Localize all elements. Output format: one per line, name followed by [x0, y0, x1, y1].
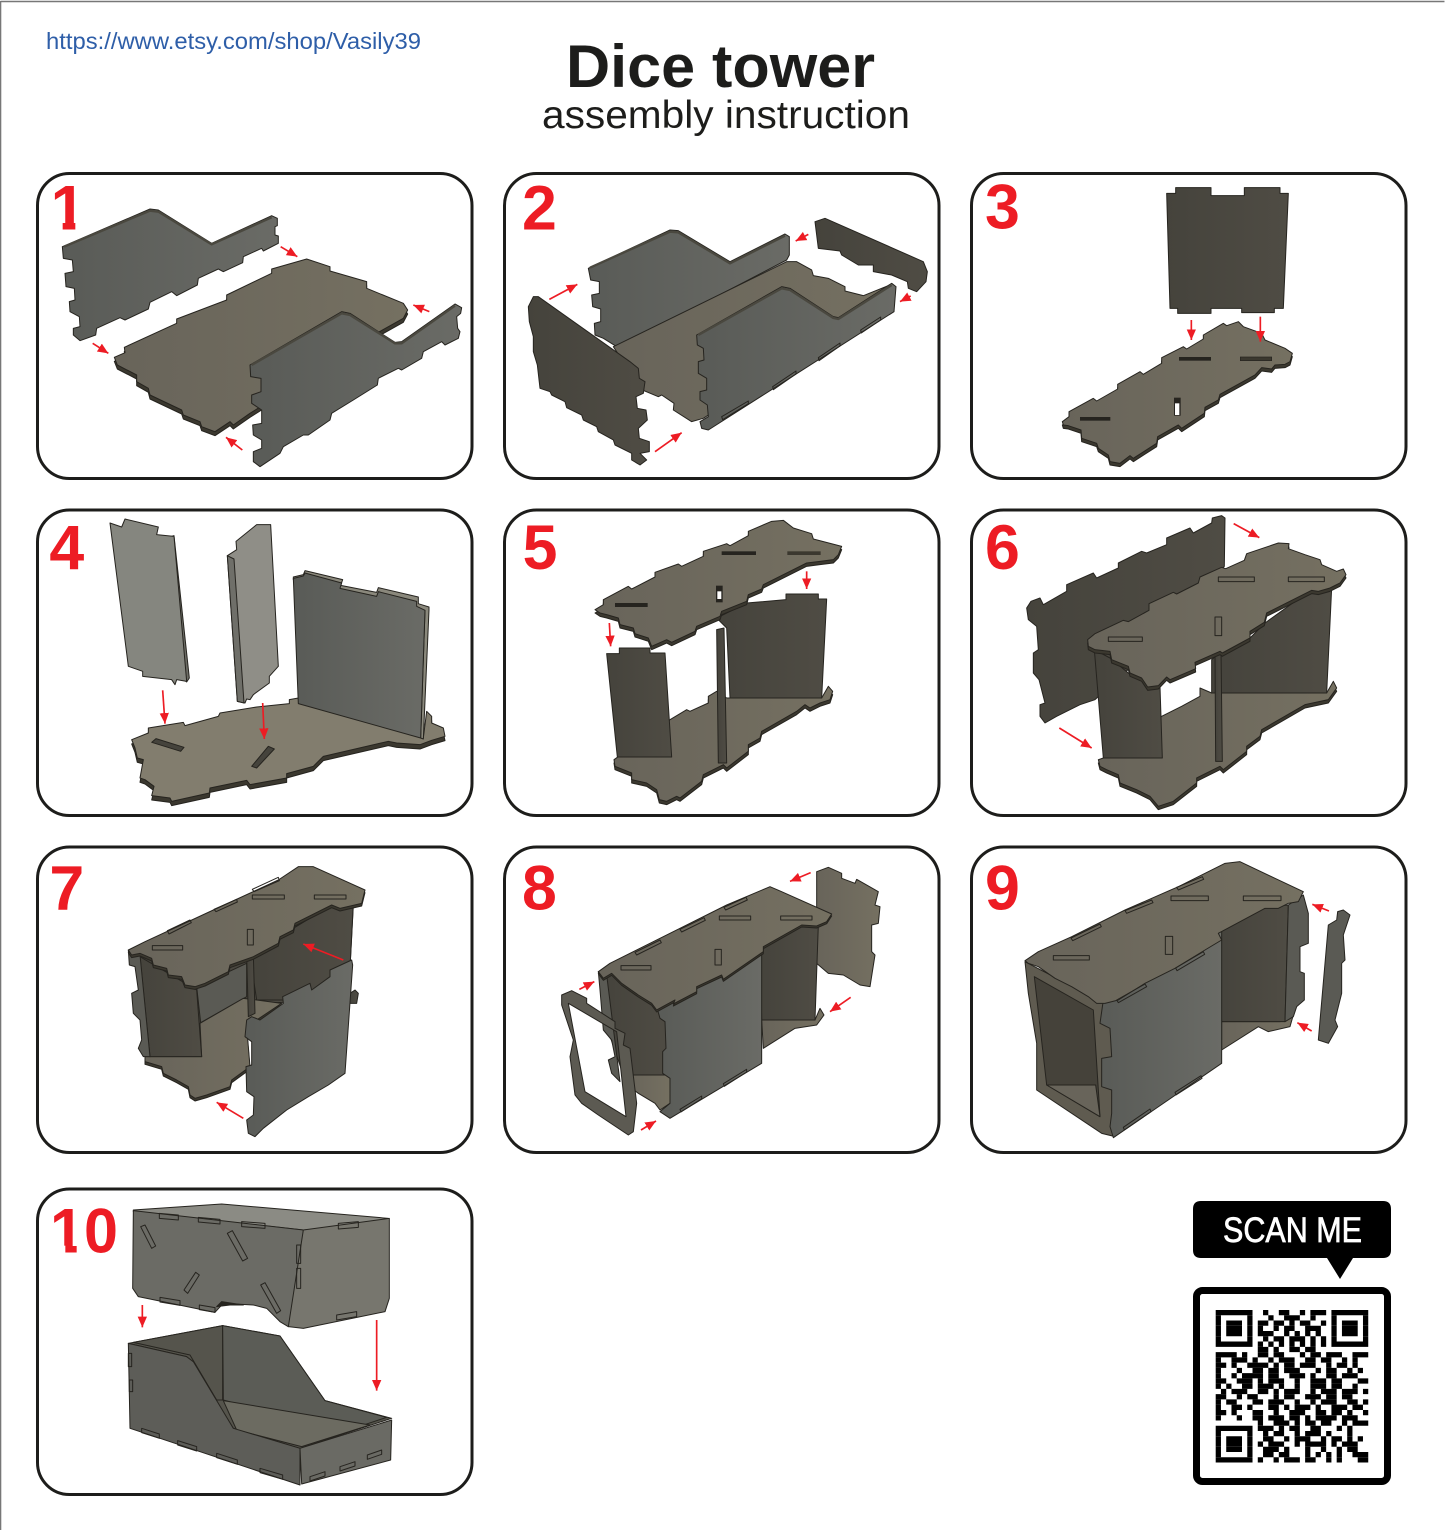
back wall [760, 923, 818, 1020]
shop URL: https://www.etsy.com/shop/Vasily39 [46, 28, 421, 54]
arrows [1297, 904, 1329, 1031]
QR code [1196, 1290, 1388, 1482]
step number 5: 5 [523, 513, 558, 583]
scan me callout [1193, 1201, 1391, 1279]
subtitle: assembly instruction [542, 94, 910, 137]
right floor [762, 1008, 824, 1048]
front frame [562, 991, 637, 1135]
right side wall [250, 304, 462, 467]
floor plate [114, 259, 408, 436]
left wall strip [128, 950, 150, 1057]
arrows [1191, 317, 1260, 342]
step number 1: 1 [51, 173, 86, 243]
upper box [133, 1204, 389, 1328]
front wall [245, 960, 353, 1137]
panel: step 6 [972, 510, 1406, 816]
interior wall [603, 973, 670, 1077]
arrows [1059, 524, 1259, 748]
panel: step 2 [504, 173, 939, 478]
right floor [1222, 1015, 1293, 1050]
interior backing [140, 905, 353, 1057]
arrows [93, 247, 429, 450]
loose strip piece [1318, 910, 1350, 1043]
arrows [142, 1305, 377, 1391]
step number 7: 7 [49, 854, 84, 924]
front wall [1094, 650, 1162, 758]
back wall [197, 903, 353, 1023]
panel: step 8 [504, 847, 939, 1152]
inner wall [1167, 188, 1288, 313]
floor plate [1062, 322, 1292, 467]
thin divider [1215, 651, 1222, 761]
lower tray interior [128, 1326, 392, 1448]
floor plate [614, 686, 833, 805]
top plate [595, 520, 842, 650]
panel: step 4 [38, 510, 472, 816]
arrows [579, 873, 851, 1130]
floor plate [132, 698, 445, 806]
panel: step 9 [972, 847, 1406, 1152]
left side wall [62, 209, 278, 341]
top plate [128, 867, 365, 989]
lower tray front [128, 1343, 392, 1485]
back wall [588, 230, 789, 348]
back wall [717, 594, 827, 698]
rear end panel [817, 867, 880, 987]
left strip [598, 972, 620, 1082]
front wall [697, 283, 896, 430]
title: Dice tower [566, 33, 875, 100]
arrows [163, 690, 264, 739]
arrows [609, 571, 807, 646]
back wall [293, 571, 429, 739]
side wall [1100, 930, 1222, 1138]
floor [613, 262, 890, 422]
scan me callout: SCAN ME [1223, 1211, 1362, 1250]
top plate [598, 887, 832, 1012]
panel: step 5 [504, 510, 939, 816]
step number 3: 3 [985, 172, 1020, 242]
panel: step 7 [38, 847, 472, 1152]
back wall [1217, 905, 1288, 1022]
front wall [607, 648, 672, 757]
right end panel [815, 218, 927, 292]
arrows [217, 944, 343, 1118]
top plate [1088, 543, 1346, 690]
arrows [549, 234, 911, 452]
tall piece left [110, 519, 189, 685]
step number 10: 10 [50, 1197, 118, 1267]
step number 9: 9 [985, 853, 1020, 923]
thin divider [247, 955, 255, 1017]
step number 2: 2 [522, 173, 557, 243]
step number 8: 8 [522, 853, 557, 923]
back wall [1212, 588, 1332, 693]
step number 6: 6 [985, 513, 1020, 583]
front wall [657, 943, 762, 1118]
inner wall [140, 957, 202, 1057]
top plate [1025, 862, 1303, 1003]
rear tab [350, 990, 358, 1003]
left end panel [528, 297, 649, 465]
tall piece middle [227, 525, 278, 703]
thin divider [717, 628, 727, 763]
left floor [628, 1075, 670, 1110]
front frame [1025, 962, 1115, 1137]
floor plate [145, 998, 282, 1101]
floor plate [1098, 681, 1337, 810]
panel: step 3 [972, 172, 1406, 478]
panel: step 1 [38, 173, 472, 478]
step number 4: 4 [49, 514, 84, 584]
rear edge strip [1285, 895, 1308, 1022]
outer side panel [1027, 516, 1225, 723]
panel: step 10 [38, 1189, 472, 1494]
